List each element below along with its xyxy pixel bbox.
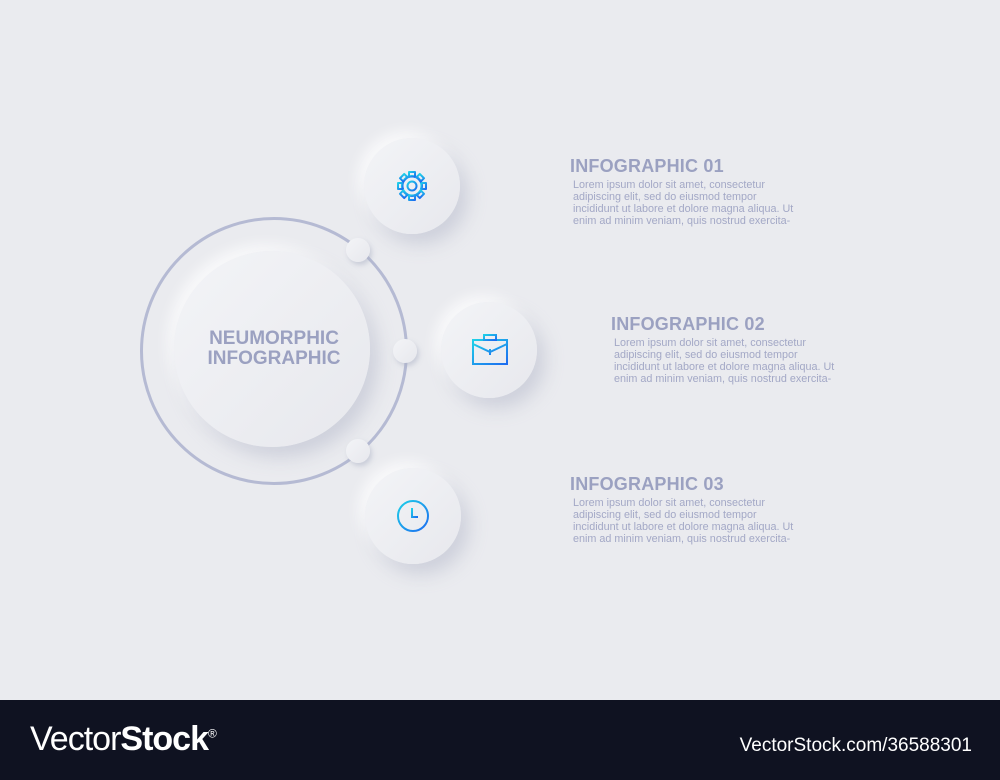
heading 01: INFOGRAPHIC 01	[570, 156, 724, 176]
center circle	[174, 251, 370, 447]
footer url: VectorStock.com/36588301	[740, 735, 972, 756]
text block 02	[611, 314, 834, 385]
footer logo: VectorStock®	[30, 720, 216, 758]
icon: gear	[397, 171, 427, 201]
knob 2	[393, 339, 417, 363]
footer bar	[0, 700, 1000, 780]
outer ring	[140, 217, 408, 485]
icon: briefcase	[472, 334, 508, 365]
icon circle: clock	[365, 468, 461, 564]
heading 02: INFOGRAPHIC 02	[611, 314, 765, 334]
icon: clock	[397, 500, 429, 532]
knob 1	[346, 238, 370, 262]
icon circle: gear	[364, 138, 460, 234]
icon circle: briefcase	[441, 302, 537, 398]
text block 01	[570, 156, 794, 227]
heading 03: INFOGRAPHIC 03	[570, 474, 724, 494]
knob 3	[346, 439, 370, 463]
body 02: Lorem ipsum dolor sit amet, consectetur adipiscing elit, sed do eiusmod tempor incididunt ut labore et dolore magna aliqua. Ut enim ad minim veniam, quis nostrud exercita-	[614, 337, 834, 385]
center title	[208, 328, 340, 369]
text block 03	[570, 474, 794, 545]
body 01: Lorem ipsum dolor sit amet, consectetur adipiscing elit, sed do eiusmod tempor incididunt ut labore et dolore magna aliqua. Ut enim ad minim veniam, quis nostrud exercita-	[573, 179, 793, 227]
center title: INFOGRAPHIC	[208, 348, 340, 369]
body 03: Lorem ipsum dolor sit amet, consectetur adipiscing elit, sed do eiusmod tempor incididunt ut labore et dolore magna aliqua. Ut enim ad minim veniam, quis nostrud exercita-	[573, 497, 793, 545]
center title: NEUMORPHIC	[209, 328, 339, 349]
